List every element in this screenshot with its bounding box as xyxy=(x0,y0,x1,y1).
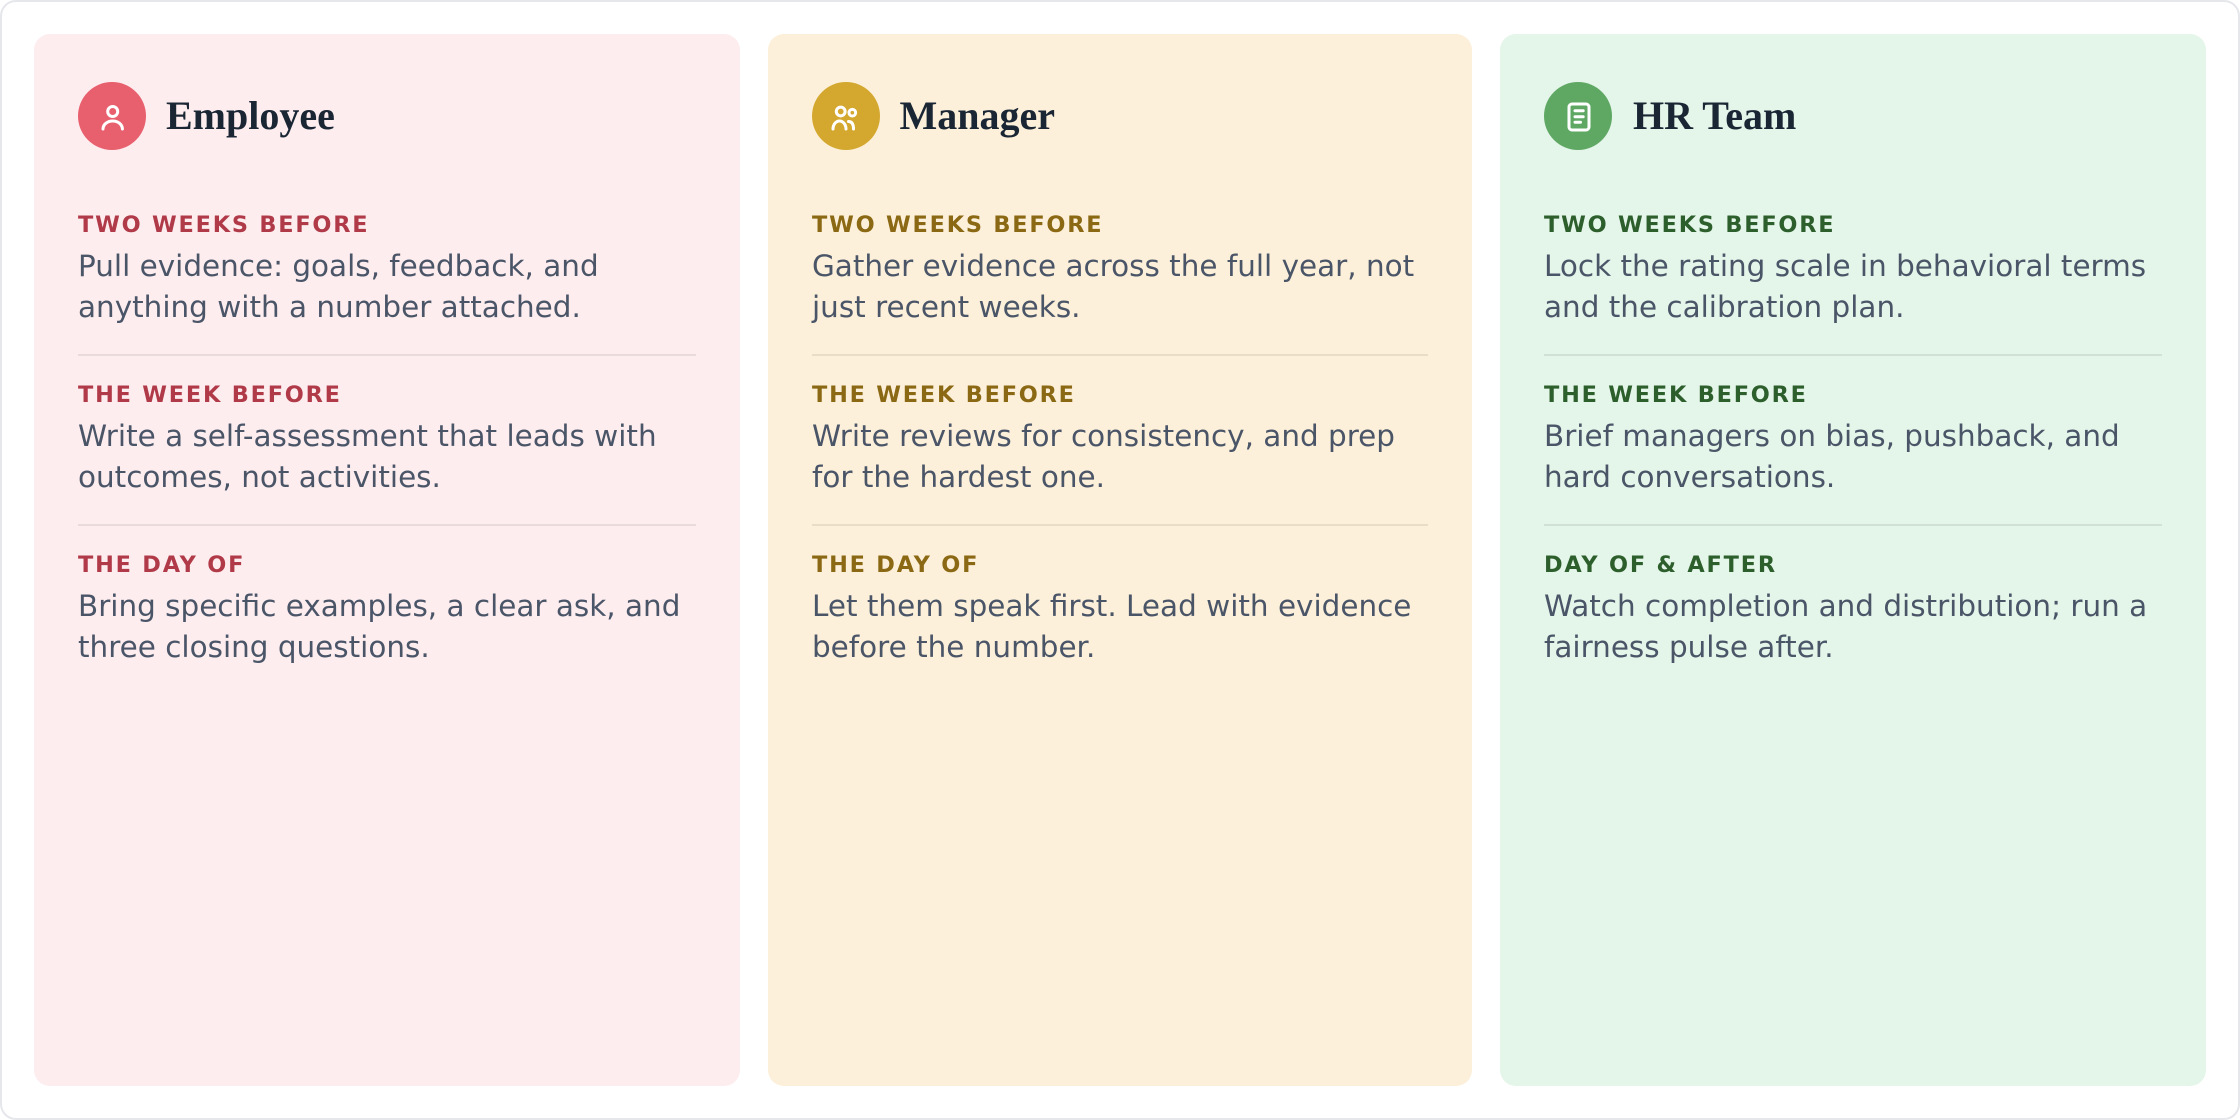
icon: person xyxy=(78,82,146,150)
step: the day of: THE DAY OF xyxy=(812,552,979,578)
panel: hr team xyxy=(1500,34,2206,1086)
step: the week before: Write a self-assessment that leads with xyxy=(78,419,657,453)
step: two weeks before: anything with a number attached. xyxy=(78,290,581,324)
step: day of and after: Watch completion and distribution; run a xyxy=(1544,589,2147,623)
step: the day of xyxy=(78,552,680,664)
step: the week before: Write reviews for consistency, and prep xyxy=(812,419,1395,453)
step: the day of: three closing questions. xyxy=(78,630,430,664)
step: two weeks before xyxy=(78,212,599,324)
panel: employee xyxy=(34,34,740,1086)
step: two weeks before: and the calibration plan. xyxy=(1544,290,1904,324)
step: day of and after xyxy=(1544,552,2147,664)
heading: hr team: HR Team xyxy=(1633,93,1796,138)
step: the week before: outcomes, not activities. xyxy=(78,460,441,494)
step: two weeks before: Lock the rating scale in behavioral terms xyxy=(1544,249,2146,283)
step: two weeks before: TWO WEEKS BEFORE xyxy=(812,212,1103,238)
step: the day of: Let them speak first. Lead with evidence xyxy=(812,589,1411,623)
panel: manager xyxy=(768,34,1472,1086)
step: two weeks before: Gather evidence across the full year, not xyxy=(812,249,1414,283)
step: two weeks before xyxy=(1544,212,2146,324)
step: two weeks before: Pull evidence: goals, feedback, and xyxy=(78,249,599,283)
step: the week before: THE WEEK BEFORE xyxy=(812,382,1076,408)
step: the day of: before the number. xyxy=(812,630,1095,664)
step: the day of xyxy=(812,552,1411,664)
step: two weeks before: just recent weeks. xyxy=(812,290,1081,324)
step: the week before xyxy=(78,382,657,494)
step: two weeks before: TWO WEEKS BEFORE xyxy=(78,212,369,238)
step: the day of: THE DAY OF xyxy=(78,552,245,578)
step: the week before: Brief managers on bias, pushback, and xyxy=(1544,419,2120,453)
step: the week before: for the hardest one. xyxy=(812,460,1105,494)
step: the week before xyxy=(1544,382,2120,494)
step: two weeks before xyxy=(811,212,1414,324)
heading: manager: Manager xyxy=(900,93,1055,138)
step: day of and after: fairness pulse after. xyxy=(1544,630,1834,664)
icon: two people xyxy=(812,82,880,150)
step: the day of: Bring specific examples, a clear ask, and xyxy=(78,589,680,623)
step: the week before xyxy=(812,382,1395,494)
icon: document xyxy=(1544,82,1612,150)
step: the week before: THE WEEK BEFORE xyxy=(1544,382,1808,408)
step: the week before: THE WEEK BEFORE xyxy=(78,382,342,408)
step: two weeks before: TWO WEEKS BEFORE xyxy=(1544,212,1835,238)
step: the week before: hard conversations. xyxy=(1544,460,1835,494)
heading: employee: Employee xyxy=(166,93,335,138)
step: day of and after: DAY OF & AFTER xyxy=(1544,552,1777,578)
